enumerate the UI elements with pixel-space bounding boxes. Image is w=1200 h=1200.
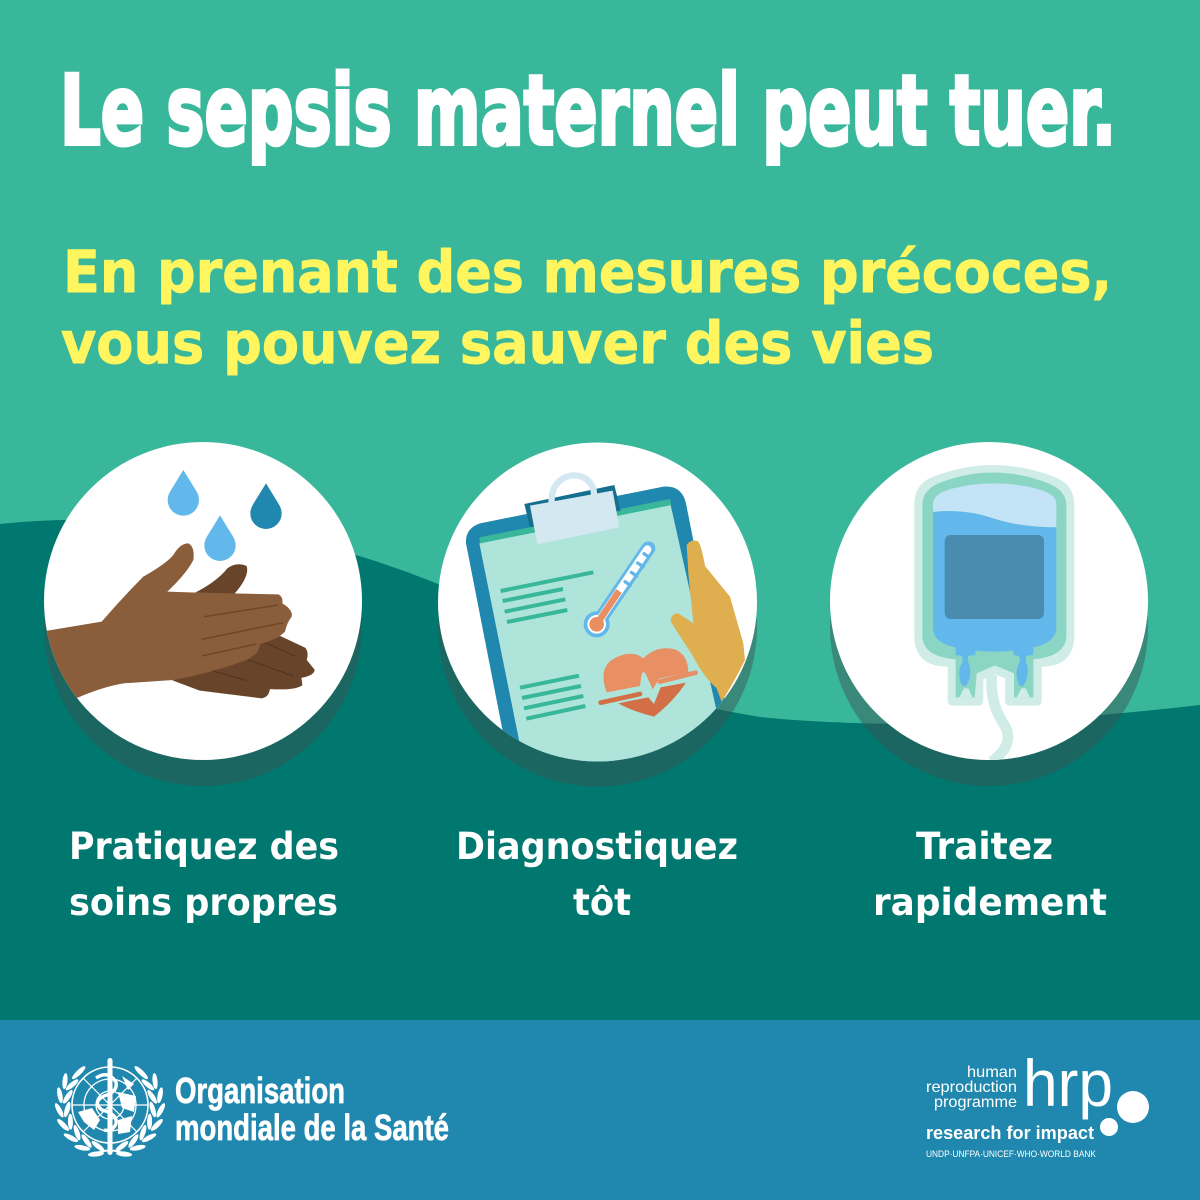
circle: treat quickly [830,442,1148,760]
logo: HRP: human [967,1064,1017,1081]
label: clean care: soins propres [69,881,338,924]
label: treat quickly [873,825,1107,924]
circle: clean care [44,442,362,760]
label: diagnose early: tôt [573,881,631,924]
panel: diagnose early [438,442,757,924]
subtitle: En prenant des mesures précoces, [63,238,1112,306]
text: WHO name: Organisation [175,1070,345,1111]
text: WHO name [175,1070,449,1148]
logo: HRP: research for impact [926,1123,1094,1143]
text: WHO name: mondiale de la Santé [175,1107,449,1148]
panel: treat quickly [830,442,1148,924]
panel: clean care [43,442,362,924]
icon: clipboard with thermometer and heart [466,472,745,762]
icon: infusion bag [914,465,1074,762]
logo: HRP: reproduction [926,1079,1017,1096]
circle shadow: clean care [44,468,362,786]
label: clean care: Pratiquez des [69,825,339,868]
logo: WHO emblem [53,1058,167,1157]
footer band [0,1020,1200,1200]
label: clean care [69,825,339,924]
label: diagnose early [456,825,738,924]
circle: diagnose early [438,442,757,762]
logo: HRP: UNDP·UNFPA·UNICEF·WHO·WORLD BANK [926,1149,1097,1160]
icon: hands and water drops [43,470,314,707]
logo: HRP: hrp [1023,1046,1113,1120]
circle shadow: treat quickly [830,468,1148,786]
subtitle: vous pouvez sauver des vies [61,309,934,377]
label: treat quickly: Traitez [916,825,1053,868]
label: diagnose early: Diagnostiquez [456,825,738,868]
circle shadow: diagnose early [438,468,757,786]
logo: HRP [926,1046,1149,1160]
logo: HRP: programme [934,1094,1017,1111]
subtitle [61,238,1112,377]
label: treat quickly: rapidement [873,881,1107,924]
